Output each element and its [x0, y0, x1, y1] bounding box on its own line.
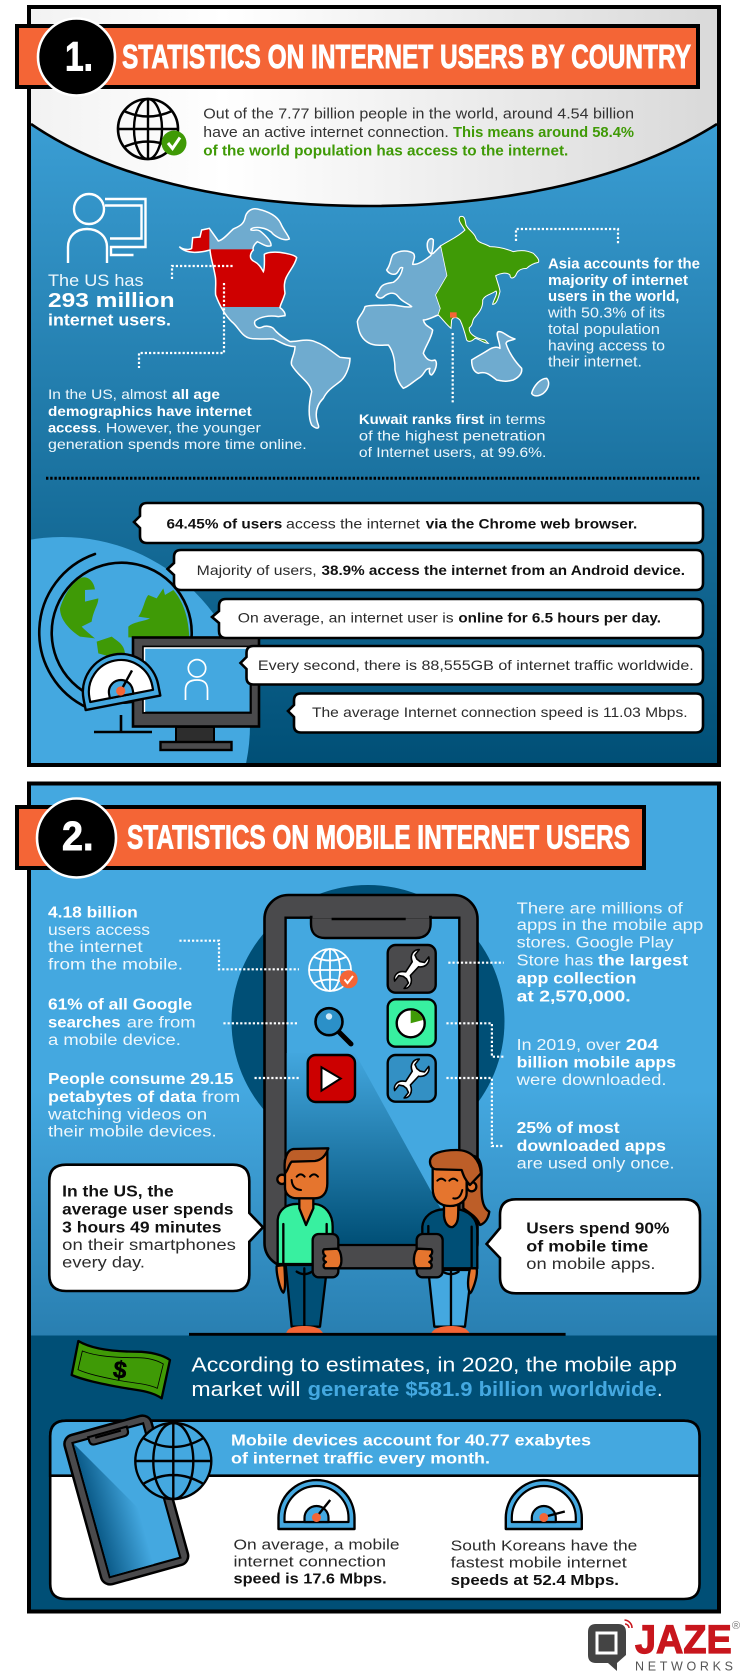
stat: app downloads — [516, 1037, 676, 1089]
panel 1 blue background — [29, 7, 719, 765]
stat: app stores: at 2,570,000. — [517, 988, 631, 1005]
icon: gauge 52.4 Mbps — [506, 1480, 582, 1529]
icon: pie chart tile — [388, 999, 436, 1047]
callout: Chrome browser: access the internet — [286, 515, 420, 531]
stat: app downloads: billion mobile apps — [517, 1055, 676, 1072]
US stat text — [48, 271, 175, 330]
callout: US daily smartphone time: every day. — [62, 1254, 145, 1271]
callout: hours online: online for 6.5 hours per day. — [458, 610, 661, 626]
icon: wrench tile blue — [388, 1055, 436, 1102]
Kuwait stat text: of the highest penetration — [359, 428, 546, 444]
map: Americas with US highlighted — [178, 208, 351, 429]
man — [277, 1148, 333, 1334]
intro text: This means around 58.4% — [453, 125, 634, 141]
heading banner 2 — [17, 798, 644, 878]
stat: Google searches: searches — [48, 1014, 121, 1031]
callout: hours online — [212, 599, 703, 638]
callout: time on mobile apps: Users spend 90% — [526, 1220, 670, 1237]
callout: US daily smartphone time: In the US, the — [62, 1184, 174, 1201]
stat: video data: from — [202, 1089, 240, 1106]
callout: Android device — [168, 550, 703, 590]
text: South Korea speed — [451, 1538, 637, 1589]
card heading text — [231, 1432, 591, 1467]
callout: US daily smartphone time: 3 hours 49 minutes — [62, 1220, 222, 1237]
callout: hours online: On average, an internet user is — [238, 610, 454, 626]
stat: app downloads: 204 — [626, 1037, 659, 1054]
Asia stat text — [547, 256, 700, 371]
text: average mobile speed: internet connection — [234, 1553, 386, 1570]
callout: time on mobile apps — [487, 1199, 700, 1293]
callout: internet traffic: Every second, there is 88,555GB of internet traffic worldwide. — [258, 657, 694, 673]
phone notch — [311, 917, 431, 938]
gauge — [76, 647, 160, 710]
callout: Android device: 38.9% access the internet from an Android device. — [322, 562, 685, 578]
text: average mobile speed: speed is 17.6 Mbps. — [234, 1571, 387, 1588]
icon: web globe with badge — [309, 949, 358, 991]
stat: Google searches — [48, 996, 196, 1049]
phone base and hands — [313, 1234, 443, 1277]
logo tagline: NETWORKS — [635, 1660, 733, 1674]
US stat text: internet users. — [48, 312, 171, 330]
stat: Google searches: 61% of all Google — [48, 996, 193, 1013]
Asia stat text: users in the world, — [548, 289, 679, 305]
stat: app stores — [517, 900, 703, 1005]
number badge 1 — [38, 18, 115, 96]
market forecast text: market will — [191, 1379, 300, 1401]
intro text: Out of the 7.77 billion people in the world, around 4.54 billion — [203, 106, 634, 122]
Asia stat text: Asia accounts for the — [548, 256, 700, 272]
dark circle behind phone — [232, 885, 504, 1158]
stat: app stores: There are millions of — [517, 900, 684, 917]
callout: Chrome browser — [134, 503, 703, 543]
stat: Google searches: a mobile device. — [48, 1032, 181, 1049]
card heading text: of internet traffic every month. — [231, 1450, 490, 1467]
stat: apps used once — [517, 1120, 675, 1172]
Asia stat text: with 50.3% of its — [547, 306, 665, 322]
stat: video data — [47, 1071, 240, 1141]
logo registered mark: ® — [732, 1620, 740, 1632]
stat: video data: watching videos on — [47, 1106, 207, 1123]
market forecast text: generate $581.9 billion worldwide — [308, 1379, 657, 1401]
text: South Korea speed: fastest mobile internet — [451, 1555, 628, 1572]
stat: mobile users: 4.18 billion — [48, 905, 138, 922]
US stat text: The US has — [48, 271, 144, 290]
panel: statistics on mobile internet users — [17, 784, 719, 1612]
callout: time on mobile apps: of mobile time — [526, 1238, 649, 1255]
stat: app stores: stores. Google Play — [517, 935, 674, 952]
intro text: of the world population has access to the internet. — [203, 144, 568, 160]
callout: Chrome browser: via the Chrome web browser. — [426, 515, 637, 531]
stat: app stores: apps in the mobile app — [517, 917, 703, 934]
Asia stat text: having access to — [548, 339, 665, 355]
callout: US daily smartphone time: on their smartphones — [62, 1237, 236, 1254]
callout: time on mobile apps: on mobile apps. — [526, 1256, 656, 1273]
panel: mobile traffic card — [50, 1413, 699, 1599]
icon: dollar bill: $ — [111, 1356, 129, 1385]
number badge 2: 2. — [62, 813, 94, 859]
stat: mobile users: from the mobile. — [48, 956, 183, 973]
card heading text: Mobile devices account for 40.77 exabytes — [231, 1432, 591, 1449]
map: Asia highlighted — [436, 216, 539, 343]
US demographics text: . However, the younger — [97, 419, 261, 435]
stat: app downloads: In 2019, over — [517, 1037, 621, 1054]
map: Kuwait marker — [450, 312, 457, 318]
Asia stat text: total population — [548, 322, 660, 338]
stat: mobile users: the internet — [48, 939, 143, 956]
callout: connection speed — [288, 694, 703, 732]
illustration: globe, gauge and monitor — [39, 554, 259, 750]
logo wordmark: JAZE — [635, 1618, 732, 1662]
text: average mobile speed: On average, a mobile — [234, 1536, 400, 1553]
stat: apps used once: are used only once. — [517, 1155, 675, 1172]
stat: mobile users — [48, 905, 183, 973]
icon: video play tile — [308, 1055, 355, 1102]
phone — [264, 895, 478, 1267]
logo icon — [588, 1620, 632, 1671]
dotted leader lines, phone — [179, 941, 505, 1146]
callout: US daily smartphone time — [49, 1165, 263, 1291]
market forecast text: . — [657, 1379, 663, 1401]
intro text — [203, 106, 634, 160]
US demographics text: access — [48, 419, 97, 435]
market band background — [31, 1336, 717, 1612]
stat: Google searches: are from — [127, 1014, 196, 1031]
icon: tilted phone — [62, 1413, 190, 1587]
number badge 1: 1. — [65, 34, 93, 80]
US demographics text — [48, 386, 307, 452]
callout: connection speed: The average Internet connection speed is 11.03 Mbps. — [312, 704, 688, 720]
panel 2 background — [29, 784, 719, 1612]
stat: apps used once: downloaded apps — [517, 1138, 666, 1155]
icon: person at monitor — [68, 194, 146, 263]
map: Australia — [472, 332, 522, 381]
stat: video data: People consume 29.15 — [48, 1071, 234, 1088]
stat: app stores: the largest — [598, 953, 688, 970]
US demographics text: In the US, almost — [48, 386, 167, 402]
map: Europe and Africa — [357, 216, 549, 396]
monitor — [133, 638, 259, 750]
panel 1 light blue circle — [31, 537, 250, 763]
text: South Korea speed: South Koreans have the — [451, 1538, 637, 1555]
icon: gauge 17.6 Mbps — [278, 1480, 354, 1529]
icon: card globe — [135, 1423, 211, 1499]
icon: magnifier — [316, 1008, 351, 1044]
stat: apps used once: 25% of most — [517, 1120, 620, 1137]
woman — [422, 1150, 489, 1334]
icon: dollar bill — [72, 1341, 170, 1398]
text: South Korea speed: speeds at 52.4 Mbps. — [451, 1572, 619, 1589]
callout: Android device: Majority of users, — [197, 562, 317, 578]
heading banner 1 — [17, 18, 698, 96]
stat: app downloads: were downloaded. — [516, 1072, 666, 1089]
stat: video data: their mobile devices. — [48, 1124, 217, 1141]
dotted leader lines, map — [139, 229, 618, 403]
intro text: have an active internet connection. — [203, 125, 449, 141]
Kuwait stat text: Kuwait ranks first — [359, 411, 484, 427]
Kuwait stat text: in terms — [489, 411, 546, 427]
text: average mobile speed — [234, 1536, 400, 1588]
market forecast text: According to estimates, in 2020, the mobile app — [191, 1355, 677, 1377]
stat: mobile users: users access — [48, 922, 150, 939]
US stat text: 293 million — [48, 289, 175, 312]
Kuwait stat text: of Internet users, at 99.6%. — [359, 444, 546, 460]
panel: statistics on internet users by country — [15, 5, 721, 767]
globe — [39, 554, 192, 732]
callout: internet traffic — [240, 646, 703, 684]
stat: app stores: Store has — [517, 953, 594, 970]
Kuwait stat text — [359, 411, 546, 460]
number badge 2 — [37, 798, 116, 878]
Asia stat text: majority of internet — [548, 273, 688, 289]
market forecast text — [191, 1355, 677, 1401]
US demographics text: generation spends more time online. — [48, 436, 307, 452]
icon: wrench tile dark — [388, 945, 436, 993]
callout: US daily smartphone time: average user spends — [62, 1202, 233, 1219]
icon: globe with check — [118, 99, 186, 159]
logo: Jaze Networks — [588, 1618, 740, 1674]
Asia stat text: their internet. — [548, 355, 642, 371]
white intro area — [31, 9, 717, 206]
US demographics text: demographics have internet — [48, 403, 252, 419]
stat: video data: petabytes of data — [48, 1089, 197, 1106]
callout: Chrome browser: 64.45% of users — [166, 515, 283, 531]
US demographics text: all age — [172, 386, 220, 402]
stat: app stores: app collection — [517, 971, 636, 988]
illustration: man and woman holding phone — [189, 1148, 566, 1334]
